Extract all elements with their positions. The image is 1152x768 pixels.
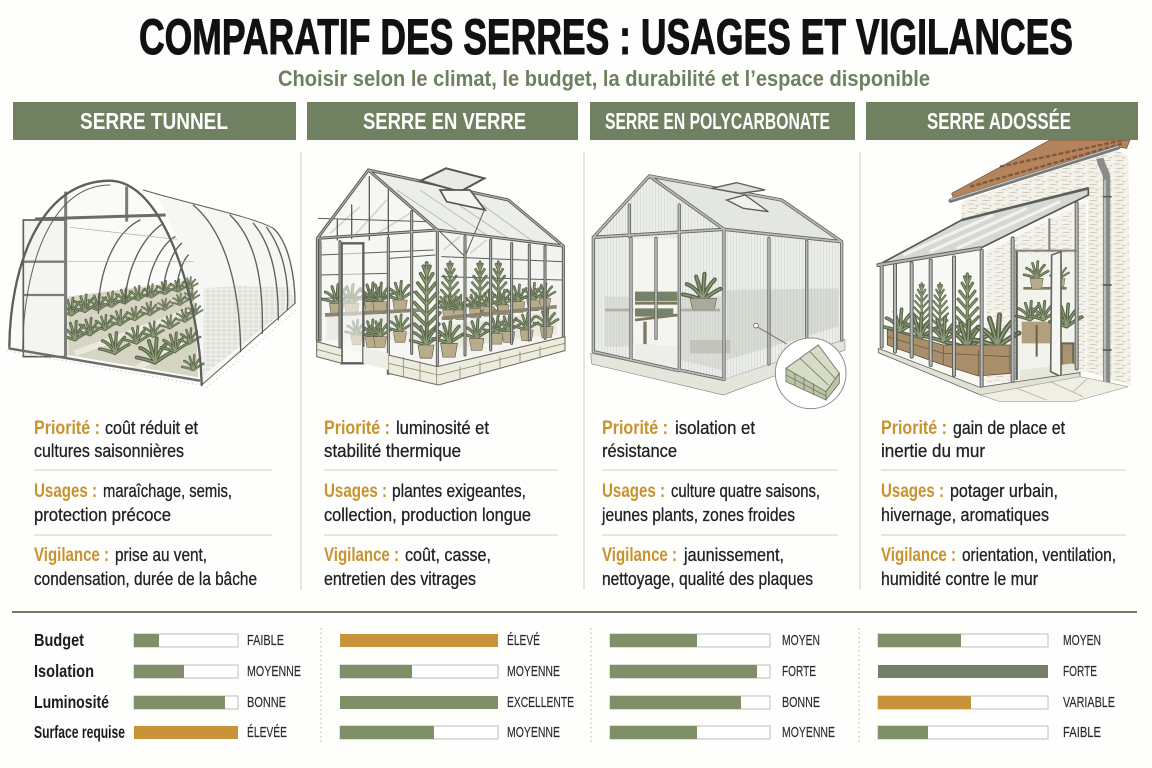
text: polycarbonate priorité: résistance xyxy=(602,441,677,461)
text: tunnel usages: protection précoce xyxy=(34,505,171,525)
text: adossée vigilance: Vigilance : xyxy=(881,545,956,566)
text: verre usages: plantes exigeantes, xyxy=(392,481,526,501)
illustration: tunnel greenhouse xyxy=(7,181,298,387)
rating labels xyxy=(34,630,125,742)
bar chart: serre en verre ratings xyxy=(340,632,574,741)
heading: serre tunnel: SERRE TUNNEL xyxy=(80,108,228,134)
bar chart: serre adossée ratings: FORTE xyxy=(1063,664,1097,680)
text: verre vigilance xyxy=(324,545,491,589)
bar chart: serre tunnel ratings: ÉLEVÉE xyxy=(247,724,287,741)
text: verre priorité: Priorité : xyxy=(324,418,390,439)
text: polycarbonate usages xyxy=(601,481,820,525)
text: tunnel vigilance xyxy=(34,545,257,589)
bar chart: serre adossée ratings: MOYEN xyxy=(1063,633,1101,649)
bar chart: serre tunnel ratings: BONNE xyxy=(247,695,286,711)
heading: serre tunnel xyxy=(13,102,296,140)
panel: serre en verre xyxy=(307,102,578,589)
illustration: polycarbonate greenhouse xyxy=(591,176,846,409)
text: polycarbonate vigilance: jaunissement, xyxy=(683,545,784,565)
heading: serre en polycarbonate: SERRE EN POLYCARBONATE xyxy=(605,108,830,134)
text: adossée usages: Usages : xyxy=(881,481,944,502)
text: adossée usages: hivernage, aromatiques xyxy=(881,505,1049,525)
text: adossée vigilance: humidité contre le mur xyxy=(881,569,1038,589)
text: tunnel priorité: cultures saisonnières xyxy=(34,441,184,461)
text: tunnel usages: maraîchage, semis, xyxy=(103,481,232,501)
heading: serre adossée xyxy=(866,102,1138,140)
rating labels: Luminosité xyxy=(34,692,109,712)
bar chart: serre adossée ratings: FAIBLE xyxy=(1063,725,1101,741)
text: tunnel usages xyxy=(34,481,232,525)
text: tunnel usages: Usages : xyxy=(34,481,97,502)
bar chart: serre en polycarbonate ratings: FORTE xyxy=(782,664,816,680)
bar chart: serre en verre ratings: MOYENNE xyxy=(507,725,560,741)
bar chart: serre en verre ratings: MOYENNE xyxy=(507,664,560,680)
text: verre priorité: luminosité et xyxy=(396,418,489,438)
bar chart: serre en polycarbonate ratings: BONNE xyxy=(782,695,820,711)
panel: serre en polycarbonate xyxy=(590,102,855,589)
heading: serre en polycarbonate xyxy=(590,102,855,140)
text: verre vigilance: entretien des vitrages xyxy=(324,569,476,589)
rating labels: Isolation xyxy=(34,661,94,681)
text: adossée usages: potager urbain, xyxy=(950,481,1058,501)
text: polycarbonate vigilance: nettoyage, qualité des plaques xyxy=(602,569,813,589)
text: verre usages: collection, production longue xyxy=(324,505,531,525)
bar chart: serre en polycarbonate ratings: MOYEN xyxy=(782,633,820,649)
text: verre priorité xyxy=(324,418,489,461)
text: polycarbonate priorité xyxy=(602,418,755,461)
text: polycarbonate usages: Usages : xyxy=(602,481,665,502)
text: tunnel vigilance: prise au vent, xyxy=(115,545,207,565)
text: tunnel vigilance: Vigilance : xyxy=(34,545,109,566)
text: polycarbonate vigilance: Vigilance : xyxy=(602,545,677,566)
text: polycarbonate priorité: isolation et xyxy=(675,418,755,438)
bar chart: serre tunnel ratings: FAIBLE xyxy=(247,633,284,649)
heading: serre en verre: SERRE EN VERRE xyxy=(363,108,526,134)
text: adossée priorité: Priorité : xyxy=(881,418,947,439)
text: adossée vigilance: orientation, ventilation, xyxy=(962,545,1116,565)
text: adossée priorité: inertie du mur xyxy=(881,441,985,461)
text: polycarbonate vigilance xyxy=(602,545,813,589)
illustration: glass greenhouse xyxy=(317,168,565,385)
text: verre usages xyxy=(324,481,531,525)
text: adossée priorité: gain de place et xyxy=(953,418,1065,438)
text: polycarbonate usages: jeunes plants, zones froides xyxy=(601,505,795,525)
panel: serre adossée xyxy=(866,102,1138,589)
bar chart: serre en polycarbonate ratings xyxy=(610,633,835,741)
bar chart: serre en polycarbonate ratings: MOYENNE xyxy=(782,725,835,741)
text: adossée priorité xyxy=(881,418,1065,461)
illustration: lean-to greenhouse xyxy=(878,139,1131,402)
text: verre vigilance: Vigilance : xyxy=(324,545,399,566)
text: polycarbonate priorité: Priorité : xyxy=(602,418,668,439)
heading: serre adossée: SERRE ADOSSÉE xyxy=(927,107,1071,134)
bar chart: serre en verre ratings: EXCELLENTE xyxy=(507,695,574,711)
bar chart: serre adossée ratings: VARIABLE xyxy=(1063,695,1115,711)
text: tunnel priorité: Priorité : xyxy=(34,418,100,439)
text: polycarbonate usages: culture quatre saisons, xyxy=(671,481,820,501)
text: adossée usages xyxy=(881,481,1058,525)
bar chart: serre tunnel ratings xyxy=(134,633,301,741)
panel: serre tunnel xyxy=(7,102,298,589)
text: tunnel priorité xyxy=(34,418,198,461)
text: verre priorité: stabilité thermique xyxy=(324,441,461,461)
rating labels: Budget xyxy=(34,630,84,650)
bar chart: serre en verre ratings: ÉLEVÉ xyxy=(507,632,540,649)
heading: serre en verre xyxy=(307,102,578,140)
text: verre vigilance: coût, casse, xyxy=(405,545,491,565)
text: tunnel priorité: coût réduit et xyxy=(105,418,198,438)
bar chart: serre adossée ratings xyxy=(878,633,1115,741)
bar chart: serre tunnel ratings: MOYENNE xyxy=(247,664,301,680)
text: adossée vigilance xyxy=(881,545,1116,589)
text: tunnel vigilance: condensation, durée de la bâche xyxy=(34,569,257,589)
rating labels: Surface requise xyxy=(34,722,125,742)
text: verre usages: Usages : xyxy=(324,481,387,502)
subtitle: Choisir selon le climat, le budget, la durabilité et l’espace disponible xyxy=(278,66,930,91)
